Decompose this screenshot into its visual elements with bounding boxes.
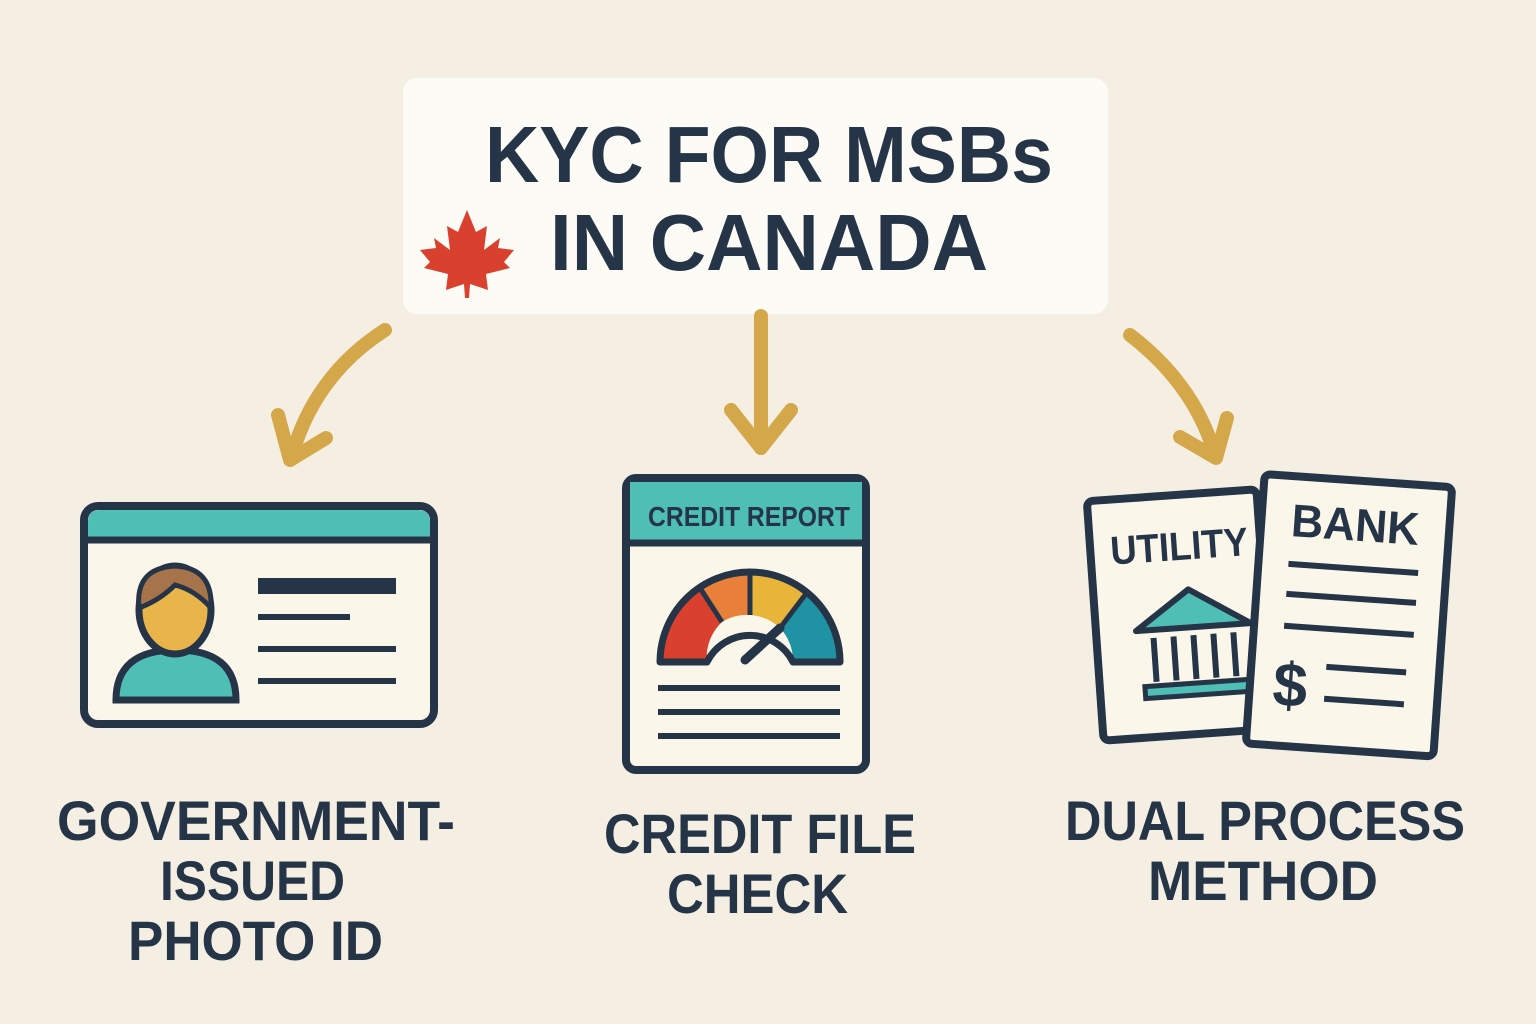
title text (485, 110, 1053, 287)
label: credit file check: CHECK (667, 862, 848, 925)
label: dual process method (1065, 789, 1465, 912)
document: utility: UTILITY (1109, 520, 1250, 574)
label: government-issued photo ID: ISSUED (160, 849, 345, 912)
document: bank: $ (1271, 650, 1310, 721)
document: bank: BANK (1290, 494, 1421, 555)
label: government-issued photo ID: PHOTO ID (128, 909, 383, 972)
label: credit file check: CREDIT FILE (604, 802, 916, 865)
title text: KYC FOR MSBs (485, 110, 1053, 199)
label: government-issued photo ID (57, 789, 455, 972)
icon: photo ID card (84, 506, 434, 724)
icon: maple leaf (420, 210, 514, 298)
title text: IN CANADA (550, 198, 988, 287)
label: credit file check (604, 802, 916, 925)
icon: credit report: CREDIT REPORT (648, 501, 850, 532)
arrow: center (731, 316, 791, 448)
label: dual process method: METHOD (1148, 849, 1378, 912)
document: utility (1087, 489, 1273, 741)
label: dual process method: DUAL PROCESS (1065, 789, 1465, 852)
label: government-issued photo ID: GOVERNMENT- (57, 789, 455, 852)
arrow: right (1130, 335, 1227, 458)
icon: credit report (626, 478, 866, 770)
title box (403, 78, 1108, 314)
document: bank (1246, 474, 1452, 757)
arrow: left (278, 330, 385, 460)
icon: utility and bank documents (1087, 474, 1452, 757)
